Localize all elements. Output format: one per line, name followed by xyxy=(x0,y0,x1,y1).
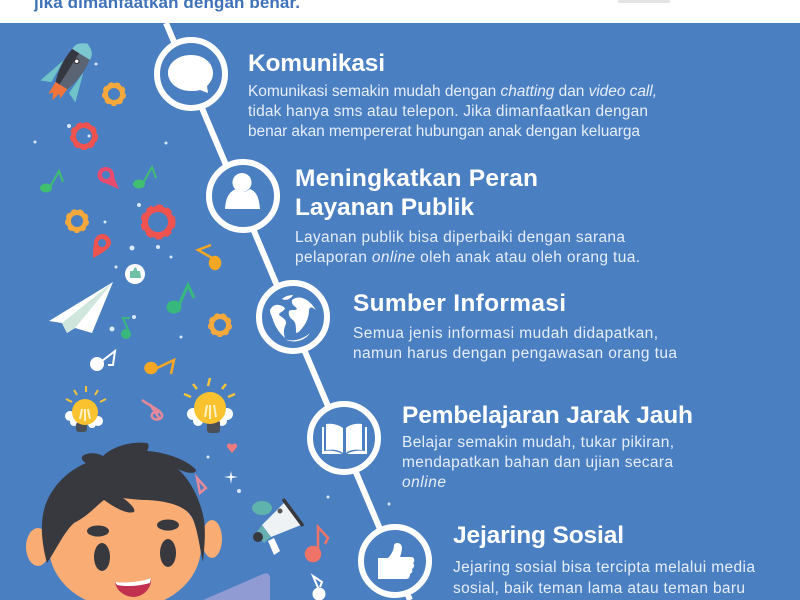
heading: Pembelajaran Jarak Jauh: Pembelajaran Jarak Jauh xyxy=(402,402,693,429)
icon: light bulb xyxy=(65,386,106,432)
eyes xyxy=(94,543,110,571)
heading: Sumber Informasi: Sumber Informasi xyxy=(353,290,566,317)
icon: person xyxy=(225,173,260,209)
character: boy xyxy=(26,443,222,600)
icon: orange gear xyxy=(104,84,124,104)
icon: sparkle xyxy=(224,471,238,484)
eyebrows xyxy=(87,526,109,536)
text: Jejaring Sosial: sosial, baik teman lama atau teman baru xyxy=(453,580,745,597)
heading: Meningkatkan Peran Layanan Publik: Layanan Publik xyxy=(295,194,474,221)
logo remnant xyxy=(618,0,670,3)
text: Pembelajaran Jarak Jauh: Belajar semakin mudah, tukar pikiran, xyxy=(402,434,674,451)
icon: speech blob xyxy=(252,501,272,515)
laptop xyxy=(203,573,270,600)
heading: Komunikasi: Komunikasi xyxy=(248,50,385,77)
text: Layanan Publik: Layanan publik bisa diperbaiki dengan sarana xyxy=(295,229,625,246)
item: Sumber Informasi xyxy=(259,283,677,362)
item: Meningkatkan Peran Layanan Publik xyxy=(209,162,640,266)
text: Komunikasi: tidak hanya sms atau telepon. Jika dimanfaatkan dengan xyxy=(248,103,648,120)
text: Sumber Informasi: Semua jenis informasi mudah didapatkan, xyxy=(353,325,658,342)
icon: treble clef xyxy=(142,400,162,420)
icon: green note xyxy=(122,318,130,338)
hair xyxy=(42,443,205,563)
icon: orange gear xyxy=(210,314,230,336)
icon: green note xyxy=(134,167,156,188)
item: Jejaring Sosial xyxy=(361,522,755,597)
icon: pin xyxy=(97,167,119,189)
icon: red gear xyxy=(72,124,96,148)
icon: paper plane xyxy=(49,282,113,333)
icon: heart xyxy=(227,444,237,453)
icon: rocket xyxy=(35,33,105,111)
text: Pembelajaran Jarak Jauh: online xyxy=(402,474,446,491)
icon: light bulb xyxy=(184,378,235,433)
icon: red gear xyxy=(142,206,174,238)
timeline line xyxy=(166,23,410,600)
icon: megaphone xyxy=(253,499,303,555)
item: Komunikasi xyxy=(157,40,657,140)
icon: orange note xyxy=(146,360,174,374)
icon: open book xyxy=(322,424,367,454)
item: Pembelajaran Jarak Jauh xyxy=(310,402,693,491)
text: Layanan Publik: pelaporan online oleh anak atau oleh orang tua. xyxy=(295,249,640,266)
icon: pink note xyxy=(197,478,206,493)
face xyxy=(49,485,201,600)
icon: thumbs up xyxy=(378,543,414,579)
ears xyxy=(26,528,50,566)
icon: speech bubble xyxy=(168,55,213,93)
text: Sumber Informasi: namun harus dengan pengawasan orang tua xyxy=(353,345,677,362)
heading: Jejaring Sosial: Jejaring Sosial xyxy=(453,522,624,549)
text: Komunikasi: benar akan mempererat hubungan anak dengan keluarga xyxy=(248,123,640,140)
mouth xyxy=(115,578,151,597)
icon: orange gear xyxy=(66,210,88,232)
icon: white note xyxy=(313,576,324,600)
text: Komunikasi: Komunikasi semakin mudah dengan chatting dan video call, xyxy=(248,83,657,100)
icon: orange note xyxy=(198,245,220,269)
icon: red note xyxy=(306,527,328,561)
text: Pembelajaran Jarak Jauh: mendapatkan bahan dan ujian secara xyxy=(402,454,673,471)
icon: pin xyxy=(93,234,111,258)
icon: white note xyxy=(91,351,115,370)
icon: green note xyxy=(41,171,63,192)
icon: green note xyxy=(168,285,194,312)
icon: globe xyxy=(270,295,316,341)
heading: Meningkatkan Peran Layanan Publik: Meningkatkan Peran xyxy=(295,165,538,192)
stars xyxy=(34,62,390,506)
icon: thumb badge xyxy=(125,264,145,284)
text: Jejaring Sosial: Jejaring sosial bisa tercipta melalui media xyxy=(453,559,755,576)
